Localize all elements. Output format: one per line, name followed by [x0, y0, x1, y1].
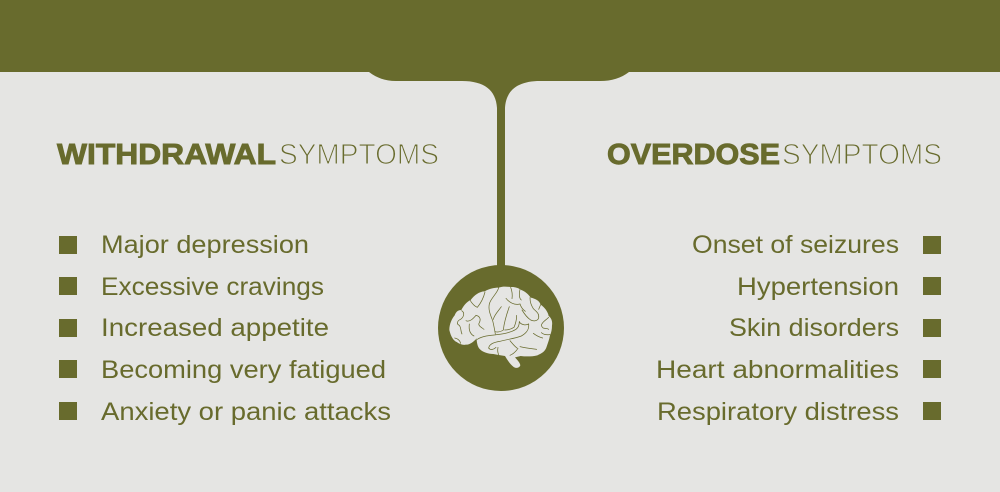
list item: major depression: Major depression [101, 231, 309, 259]
list item: onset of seizures: Onset of seizures [692, 231, 899, 259]
heading: overdose symptoms: OVERDOSE [607, 139, 780, 171]
heading: withdrawal symptoms: WITHDRAWAL [57, 139, 276, 171]
list: overdose symptoms [656, 231, 941, 426]
list item: becoming very fatigued: Becoming very fatigued [101, 356, 386, 384]
list item: increased appetite: Increased appetite [101, 314, 329, 342]
list: withdrawal symptoms [59, 231, 391, 426]
list item: heart abnormalities: Heart abnormalities [656, 356, 899, 384]
top banner with stem [0, 0, 1000, 270]
list item: skin disorders: Skin disorders [729, 314, 899, 342]
list item: hypertension: Hypertension [737, 273, 899, 301]
heading: withdrawal symptoms [57, 139, 439, 171]
heading: overdose symptoms [607, 139, 942, 171]
list item: excessive cravings: Excessive cravings [101, 273, 324, 301]
list item: anxiety or panic attacks: Anxiety or panic attacks [101, 398, 391, 426]
list item: respiratory distress: Respiratory distress [657, 398, 899, 426]
icon: brain in circle [438, 265, 564, 391]
heading: overdose symptoms: SYMPTOMS [782, 139, 942, 171]
heading: withdrawal symptoms: SYMPTOMS [279, 139, 439, 171]
